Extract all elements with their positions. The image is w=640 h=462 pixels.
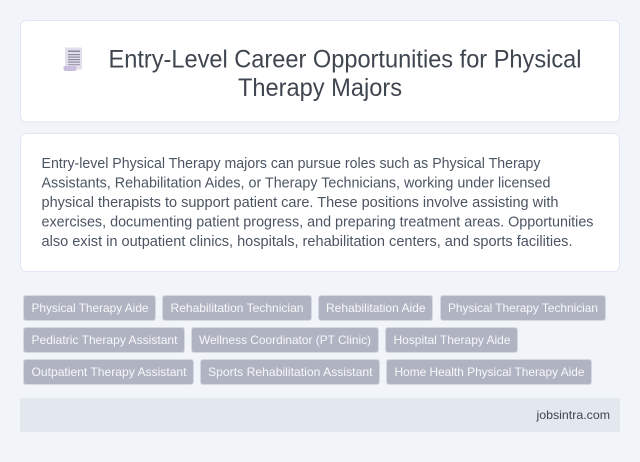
tag: Physical Therapy Aide — [24, 296, 156, 320]
tag: Wellness Coordinator (PT Clinic) — [192, 328, 378, 352]
title — [108, 46, 582, 102]
text block: description: also exist in outpatient clinics, hospitals, rehabilitation centers, and sports facilities. — [42, 234, 572, 250]
text block: description: physical therapists to support patient care. These positions involve assisting with — [42, 195, 558, 211]
tag: Pediatric Therapy Assistant — [24, 328, 184, 352]
panel: title card — [20, 20, 620, 122]
title: Entry-Level Career Opportunities for Physical — [108, 46, 582, 74]
tag: Hospital Therapy Aide — [386, 328, 518, 352]
tag: Home Health Physical Therapy Aide — [386, 360, 592, 384]
text block: description: Entry-level Physical Therapy majors can pursue roles such as Physical Therapy — [42, 156, 541, 172]
icon: document scroll — [64, 48, 82, 71]
tag: Rehabilitation Technician — [162, 296, 312, 320]
text block: description: Assistants, Rehabilitation Aides, or Therapy Technicians, working under licensed — [42, 176, 550, 192]
tag: Rehabilitation Technician: Rehabilitation Technician — [170, 301, 304, 315]
panel: description card — [20, 134, 620, 272]
tag: Physical Therapy Aide: Physical Therapy Aide — [32, 301, 149, 315]
tag: Home Health Physical Therapy Aide: Home Health Physical Therapy Aide — [394, 365, 585, 379]
tag: Outpatient Therapy Assistant — [24, 360, 194, 384]
tag: Sports Rehabilitation Assistant — [200, 360, 380, 384]
tag: Sports Rehabilitation Assistant: Sports Rehabilitation Assistant — [208, 365, 373, 379]
tag: Rehabilitation Aide: Rehabilitation Aide — [326, 301, 426, 315]
tags: job roles — [24, 296, 606, 384]
text block: description — [42, 156, 594, 250]
footer text: source: jobsintra.com — [535, 408, 610, 422]
title: Therapy Majors — [238, 74, 402, 102]
tag: Physical Therapy Technician: Physical Therapy Technician — [448, 301, 598, 315]
footer bar — [20, 398, 620, 432]
tag: Hospital Therapy Aide: Hospital Therapy Aide — [394, 333, 511, 347]
tag: Physical Therapy Technician — [440, 296, 606, 320]
text block: description: exercises, documenting patient progress, and preparing treatment areas. Opportunities — [42, 214, 594, 230]
tag: Pediatric Therapy Assistant: Pediatric Therapy Assistant — [32, 333, 178, 347]
tag: Rehabilitation Aide — [318, 296, 432, 320]
tag: Wellness Coordinator (PT Clinic): Wellness Coordinator (PT Clinic) — [199, 333, 371, 347]
tag: Outpatient Therapy Assistant: Outpatient Therapy Assistant — [32, 365, 187, 379]
